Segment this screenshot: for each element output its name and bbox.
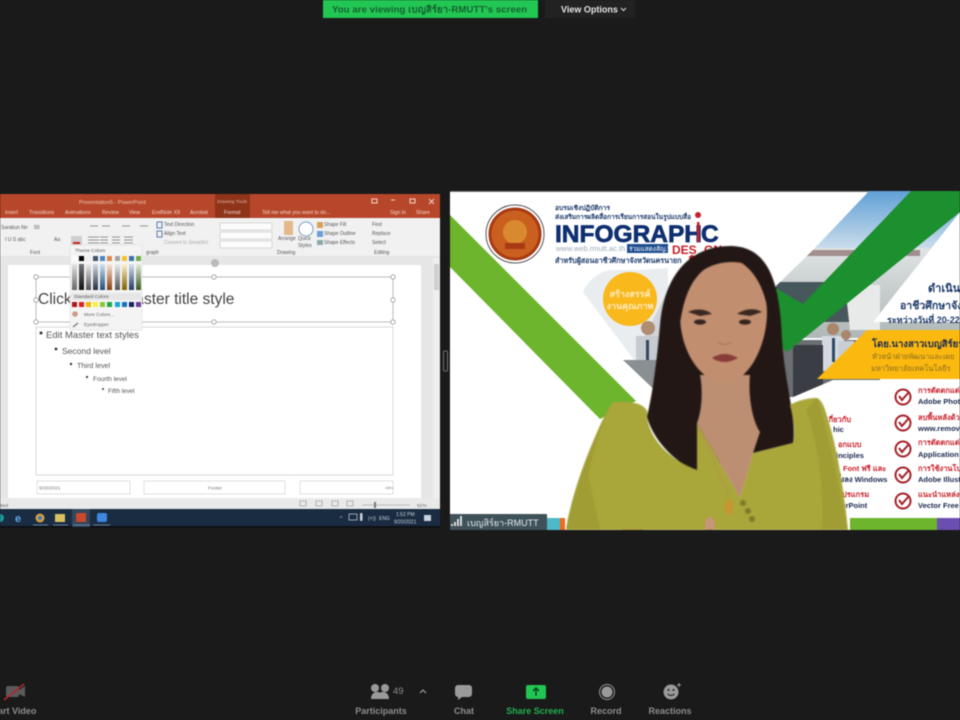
event details: ดำเนิน bbox=[928, 282, 960, 295]
right checklist: Vector Free bbox=[918, 501, 959, 510]
face bbox=[680, 262, 767, 384]
workshop title block: ส่งเสริมการผลิตสื่อการเรียนการสอนในรูปแบบสื่อ bbox=[555, 211, 691, 222]
windows taskbar: (×)) bbox=[368, 516, 376, 522]
slide footer placeholders: <#> bbox=[385, 486, 393, 492]
windows taskbar: ^ bbox=[340, 516, 343, 522]
background photo left bbox=[583, 268, 668, 397]
font colour dropdown menu: Standard Colors bbox=[74, 294, 109, 300]
left list of topics: เกี่ยวกับ bbox=[826, 413, 851, 424]
dress bbox=[566, 398, 848, 530]
view options button: View Options bbox=[561, 4, 618, 14]
yellow badge bbox=[603, 272, 657, 326]
viewing banner: You are viewing เบญสิร์ยา-RMUTT's screen bbox=[332, 4, 527, 16]
icon: reactions: Reactions bbox=[648, 706, 692, 716]
icon: chat bbox=[454, 685, 474, 716]
status bar: 52% bbox=[417, 503, 427, 509]
icon: record: Record bbox=[590, 706, 622, 716]
ribbon: Sarabun Ne bbox=[1, 225, 28, 231]
workshop title block: GN bbox=[704, 243, 722, 257]
view options button bbox=[545, 0, 635, 18]
font colour dropdown menu: Eyedropper bbox=[84, 322, 109, 328]
left list of topics: Font ฟรี และ bbox=[843, 464, 886, 473]
workshop title block: www.web.rmutt.ac.th bbox=[555, 244, 625, 253]
powerpoint title bar bbox=[0, 194, 440, 218]
font colour dropdown menu: Theme Colors bbox=[75, 248, 106, 254]
icon: participants bbox=[355, 684, 426, 716]
slide title placeholder bbox=[34, 259, 395, 324]
yellow badge: สร้างสรรค์ bbox=[610, 288, 650, 299]
workshop title block: DES bbox=[672, 243, 697, 257]
windows taskbar: ENG bbox=[379, 516, 390, 522]
windows taskbar: e bbox=[15, 513, 21, 525]
panel: powerpoint window bbox=[0, 194, 440, 528]
workshop title block: C bbox=[701, 221, 719, 248]
workshop title block: สำหรับผู้สอนอาชีวศึกษาจังหวัดนครนายก bbox=[555, 256, 682, 266]
institution logo bbox=[486, 205, 544, 263]
slide footer placeholders: Footer bbox=[208, 486, 222, 492]
left list of topics: ปรแกรม bbox=[842, 490, 869, 499]
ribbon: I U S abc bbox=[5, 237, 26, 243]
right checklist bbox=[896, 386, 960, 510]
ribbon: Convert to SmartArt bbox=[164, 240, 209, 246]
ribbon: Text Direction bbox=[164, 222, 195, 228]
slide body placeholder: Fifth level bbox=[108, 388, 134, 395]
yellow badge: งานคุณภาพ bbox=[607, 301, 654, 312]
slide canvas bbox=[8, 258, 440, 498]
hand bbox=[705, 517, 715, 533]
icon: record bbox=[590, 684, 622, 716]
workshop title block bbox=[555, 204, 722, 266]
workshop title block: INFOGRAPH bbox=[555, 221, 702, 248]
font colour dropdown menu: More Colors... bbox=[84, 312, 114, 318]
dark green check mark bbox=[772, 190, 960, 352]
ribbon: Align Text bbox=[164, 231, 186, 237]
ribbon: Find bbox=[372, 222, 382, 228]
powerpoint title bar: Tell me what you want to do... bbox=[262, 210, 330, 216]
left list of topics: inciples bbox=[836, 451, 864, 460]
ribbon: Shape Outline bbox=[324, 231, 356, 237]
viewing banner bbox=[323, 0, 538, 18]
slide footer placeholders bbox=[37, 481, 393, 494]
bottom colour strip bbox=[547, 518, 960, 530]
windows taskbar: 1:52 PM bbox=[396, 512, 415, 518]
light green diagonal band bbox=[450, 215, 636, 419]
hair back bbox=[647, 246, 794, 471]
ribbon: Arrange bbox=[278, 236, 296, 242]
presenter bbox=[566, 246, 848, 533]
right checklist: Application bbox=[918, 450, 959, 459]
font colour dropdown menu bbox=[70, 245, 142, 330]
event details bbox=[887, 282, 960, 325]
speaker banner bbox=[817, 330, 960, 379]
powerpoint title bar: EndNote X9 bbox=[152, 210, 180, 216]
left list of topics: PowerPoint bbox=[826, 501, 868, 510]
ribbon: Shape Fill bbox=[324, 222, 346, 228]
ribbon: Shape Effects bbox=[324, 240, 356, 246]
powerpoint title bar: Acrobat bbox=[190, 210, 208, 216]
powerpoint title bar: Presentation5 - PowerPoint bbox=[79, 200, 146, 206]
ribbon: Editing bbox=[374, 250, 390, 256]
left list of topics: อกแบบ bbox=[838, 440, 862, 449]
ribbon bbox=[0, 218, 440, 256]
powerpoint title bar: Review bbox=[102, 210, 119, 216]
windows taskbar bbox=[0, 509, 440, 528]
slide body placeholder: Fourth level bbox=[93, 376, 128, 383]
slide body placeholder: Third level bbox=[77, 361, 111, 370]
ribbon: Replace bbox=[372, 231, 391, 237]
name tag: เบญสิร์ยา-RMUTT bbox=[467, 517, 539, 528]
icon: participants: 49 bbox=[393, 686, 404, 697]
powerpoint title bar: Transitions bbox=[29, 210, 55, 216]
icon: participants: Participants bbox=[355, 706, 407, 716]
pane divider handle bbox=[444, 351, 448, 371]
ribbon: 50 bbox=[34, 225, 40, 231]
slide body placeholder: Edit Master text styles bbox=[46, 330, 139, 341]
icon: reactions bbox=[648, 683, 692, 716]
powerpoint title bar: Sign in bbox=[390, 210, 406, 216]
slide body placeholder: Second level bbox=[62, 346, 111, 356]
ribbon: Aa bbox=[54, 237, 60, 243]
left list of topics bbox=[826, 413, 887, 510]
event details: ระหว่างวันที่ 20-22 bbox=[887, 313, 960, 325]
ribbon: Styles bbox=[298, 243, 312, 249]
left list of topics: ติดตั้งลง Windows bbox=[826, 473, 887, 484]
neck and chest bbox=[697, 375, 760, 498]
name tag bbox=[450, 514, 547, 530]
icon: share screen: Share Screen bbox=[506, 706, 564, 716]
necklace bbox=[697, 425, 729, 495]
speaker banner: หัวหน้าฝ่ายพัฒนาและเผย bbox=[872, 352, 954, 361]
speaker banner: มหาวิทยาลัยเทคโนโลยีร bbox=[871, 364, 951, 373]
status bar: tted bbox=[0, 503, 8, 509]
powerpoint title bar: Share bbox=[416, 210, 430, 216]
windows taskbar: 9/20/2021 bbox=[394, 520, 416, 526]
powerpoint title bar: Format bbox=[224, 210, 241, 216]
panel: presenter video bbox=[450, 190, 960, 533]
status bar bbox=[0, 498, 440, 509]
powerpoint title bar: Animations bbox=[65, 210, 91, 216]
ribbon: Drawing bbox=[277, 250, 296, 256]
workshop title block: อบรมเชิงปฏิบัติการ bbox=[555, 204, 610, 212]
powerpoint title bar: View bbox=[129, 210, 140, 216]
slide footer placeholders: 9/20/2021 bbox=[39, 486, 61, 492]
icon: share screen bbox=[506, 685, 564, 716]
ribbon: Select bbox=[372, 240, 387, 246]
powerpoint title bar: Insert bbox=[5, 210, 19, 216]
background photo right bbox=[770, 190, 960, 400]
icon: chat: Chat bbox=[454, 706, 474, 716]
hair front bbox=[679, 262, 768, 322]
powerpoint title bar: Drawing Tools bbox=[217, 199, 248, 205]
slide body placeholder bbox=[36, 327, 393, 475]
workshop title block: ร่วมแสดงสัญ.ที่ bbox=[629, 244, 672, 253]
ribbon: Quick bbox=[298, 236, 311, 242]
left list of topics: hic bbox=[833, 425, 844, 434]
icon: start video bbox=[0, 684, 37, 716]
ribbon: Font bbox=[30, 250, 41, 256]
slide title placeholder: Click to edit Master title style bbox=[38, 291, 234, 308]
ribbon: graph bbox=[146, 250, 159, 256]
